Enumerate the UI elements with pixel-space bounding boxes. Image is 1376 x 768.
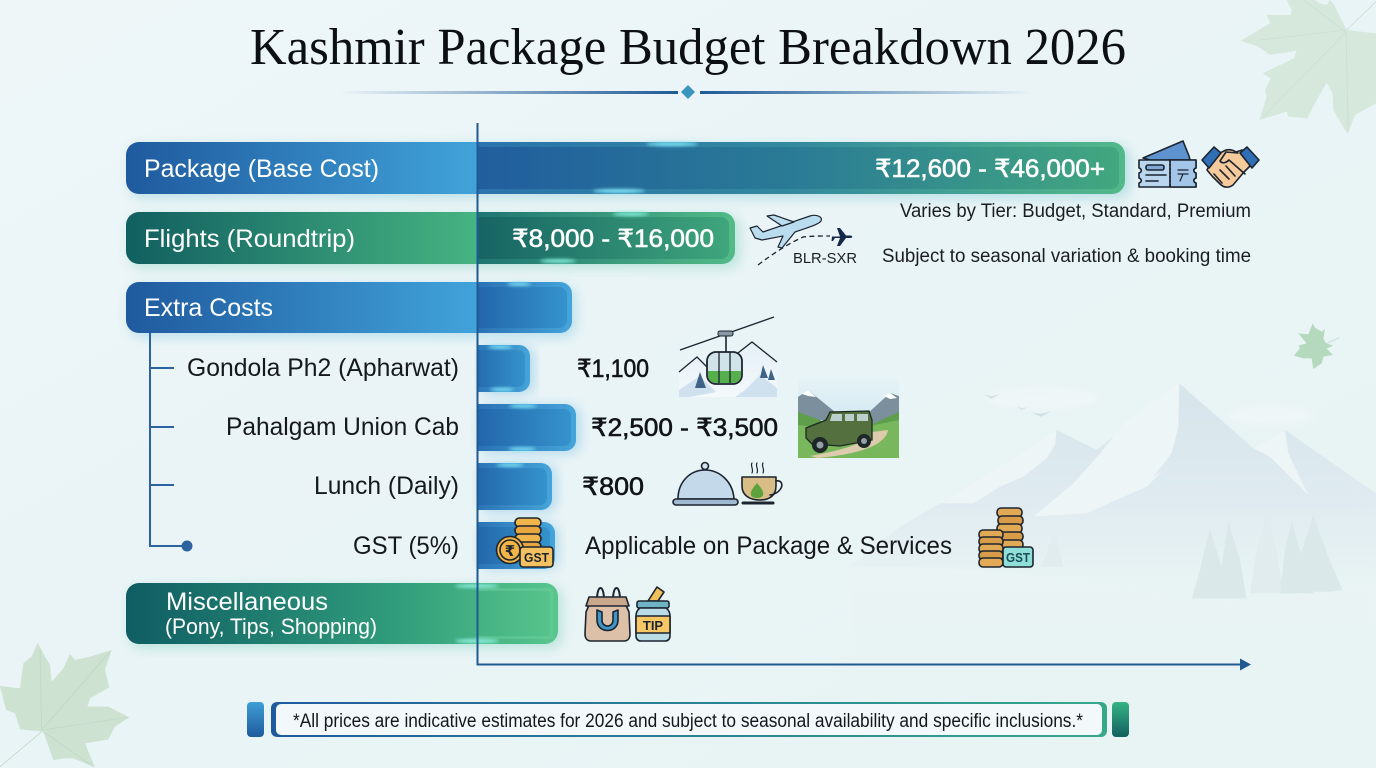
title divider (340, 85, 1035, 99)
icon: food cloche and tea cup (673, 462, 782, 505)
bar: package base cost (126, 142, 1130, 198)
sub-item labels: Pahalgam Union Cab (226, 413, 459, 441)
sub-item labels: Lunch (Daily) (314, 472, 459, 500)
icon: jeep in mountain valley (798, 378, 899, 458)
sub-bar: pahalgam cab (460, 404, 580, 453)
bar: package base cost: ₹12,600 - ₹46,000+ (875, 155, 1105, 183)
icon: ticket (1139, 141, 1196, 187)
bar: miscellaneous: (Pony, Tips, Shopping) (165, 614, 377, 639)
package notes: Varies by Tier: Budget, Standard, Premium (900, 201, 1251, 222)
bar: miscellaneous: Miscellaneous (166, 588, 328, 616)
sub-item prices: ₹1,100 (577, 355, 649, 383)
package notes (882, 201, 1251, 267)
bar: flights roundtrip: ₹8,000 - ₹16,000 (512, 225, 714, 253)
chart axes (478, 123, 1251, 670)
icon: rupee coins with gst tag: GST (524, 550, 549, 565)
icon: rupee coins with gst tag (496, 518, 553, 567)
sub-item prices (577, 355, 778, 501)
icon: plane with route: BLR-SXR (793, 250, 857, 267)
extra costs tree connector (150, 333, 192, 550)
bar: flights roundtrip (126, 212, 740, 268)
bar: extra costs: Extra Costs (144, 294, 273, 322)
sub-bar: lunch (460, 463, 556, 512)
icon: rupee coins with gst tag: ₹ (505, 543, 515, 560)
title: Kashmir Package Budget Breakdown 2026 (250, 19, 1126, 76)
footnote bar: *All prices are indicative estimates for 2026 and subject to seasonal availability and specific inclusions.* (293, 711, 1084, 732)
sub-item labels: GST (5%) (353, 532, 459, 560)
sub-item prices: ₹2,500 - ₹3,500 (591, 414, 778, 442)
icon: shopping bag (585, 588, 630, 641)
icon: plane with route (750, 215, 857, 267)
package notes: Subject to seasonal variation & booking time (882, 246, 1251, 267)
icon: gondola with mountains (679, 317, 777, 397)
decorative maple leaf: top right (1241, 0, 1376, 134)
bar: miscellaneous (126, 583, 562, 648)
bar: extra costs (126, 282, 576, 337)
sub-item prices: ₹800 (582, 473, 644, 501)
bar: flights roundtrip: Flights (Roundtrip) (144, 225, 355, 253)
bar: package base cost: Package (Base Cost) (144, 155, 379, 183)
icon: tip jar (636, 587, 670, 641)
decorative maple leaf: small right (1294, 324, 1339, 369)
icon: handshake (1202, 147, 1259, 187)
sub-bar: gondola (460, 345, 534, 394)
sub-item labels (187, 354, 459, 560)
icon: coin stacks with gst tag (979, 508, 1033, 567)
mountain landscape (850, 383, 1376, 670)
icon: tip jar: TIP (643, 618, 663, 633)
sub-bar: gst (460, 522, 558, 569)
icon: coin stacks with gst tag: GST (1006, 550, 1030, 565)
gst note: Applicable on Package & Services (585, 532, 952, 560)
sub-item labels: Gondola Ph2 (Apharwat) (187, 354, 459, 382)
decorative maple leaf: bottom left (0, 643, 129, 767)
footnote bar (247, 702, 1129, 737)
